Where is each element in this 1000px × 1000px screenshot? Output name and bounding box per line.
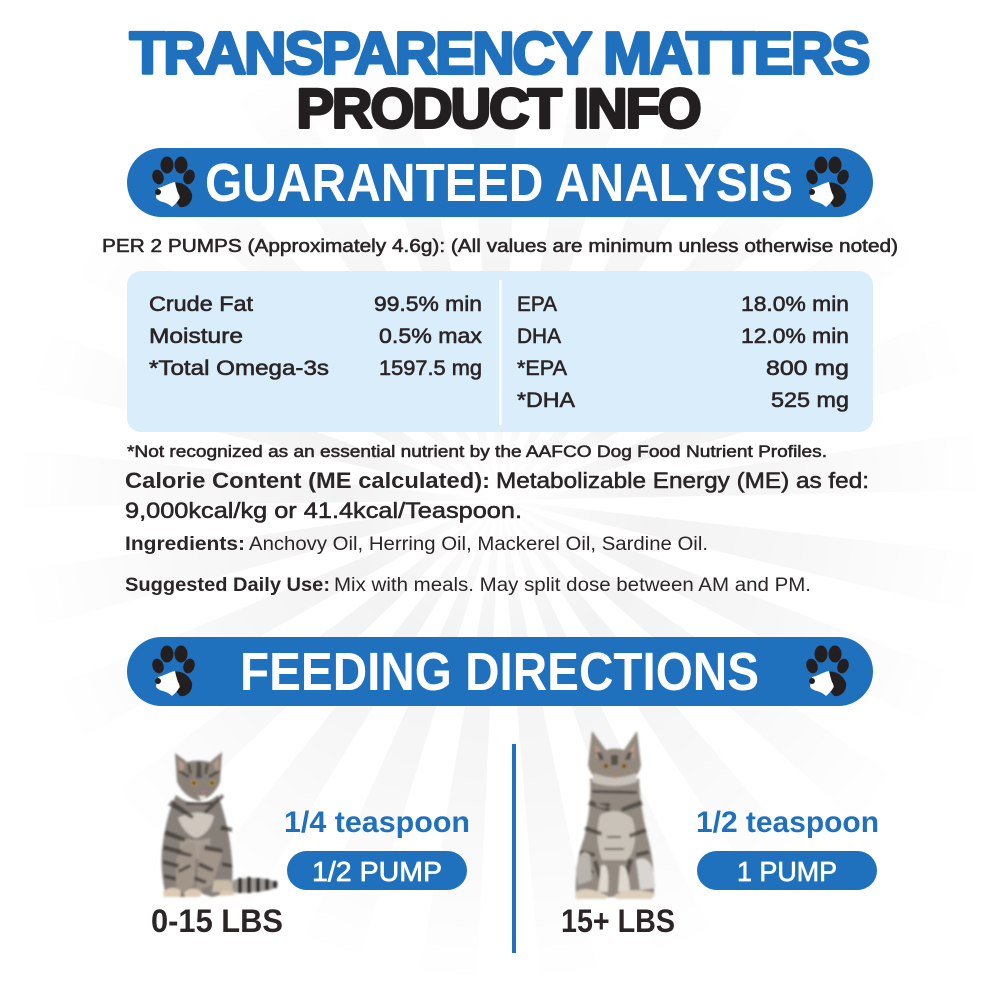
pill: 1/2 pump xyxy=(287,851,467,890)
left column: 1597.5 mg xyxy=(379,356,482,380)
left column: Crude Fat xyxy=(149,292,253,316)
right column: 12.0% min xyxy=(741,324,849,348)
label: 0-15 lbs: 0-15 LBS xyxy=(151,903,283,939)
title line: product info: PRODUCT INFO xyxy=(296,76,702,140)
icon: tabby cat small xyxy=(162,752,278,897)
icon: maine coon cat xyxy=(575,731,655,899)
right column: *DHA xyxy=(517,388,576,412)
right column: 525 mg xyxy=(771,388,849,412)
dose: 1/4 teaspoon: 1/4 teaspoon xyxy=(284,806,470,839)
icon: paw left xyxy=(150,156,197,207)
banner: feeding directions xyxy=(127,637,873,706)
ingredients: Ingredients: xyxy=(125,534,245,555)
suggested daily use: Suggested Daily Use: xyxy=(125,575,330,596)
right column xyxy=(517,292,849,412)
left column: Moisture xyxy=(149,324,243,348)
calorie content: Calorie Content (ME calculated): xyxy=(125,468,490,493)
subheading: per 2 pumps: PER 2 PUMPS (Approximately 4.6g): (All values are minimum unless otherwise noted) xyxy=(102,236,898,256)
pill: 1/2 pump: 1/2 PUMP xyxy=(312,856,442,887)
icon: paw right xyxy=(804,646,851,696)
right column: 18.0% min xyxy=(741,292,849,316)
label: 15+ lbs: 15+ LBS xyxy=(561,903,675,939)
pill: 1 pump: 1 PUMP xyxy=(737,856,837,887)
left column: *Total Omega-3s xyxy=(149,356,329,380)
calorie content xyxy=(125,468,869,523)
dose: 1/2 teaspoon: 1/2 teaspoon xyxy=(696,806,879,839)
pill: 1 pump xyxy=(697,851,877,890)
right column: 800 mg xyxy=(766,356,849,380)
right column: EPA xyxy=(517,292,558,316)
suggested daily use: Mix with meals. May split dose between AM and PM. xyxy=(334,575,811,596)
banner text: FEEDING DIRECTIONS xyxy=(240,642,759,702)
suggested daily use xyxy=(125,575,811,596)
divider xyxy=(512,744,516,953)
left column xyxy=(149,292,482,380)
banner text: GUARANTEED ANALYSIS xyxy=(205,153,793,213)
right column: DHA xyxy=(517,324,562,348)
calorie content: 9,000kcal/kg or 41.4kcal/Teaspoon. xyxy=(125,498,522,523)
right column: *EPA xyxy=(517,356,568,380)
title xyxy=(130,20,870,140)
banner: guaranteed analysis xyxy=(127,148,873,217)
calorie content: Metabolizable Energy (ME) as fed: xyxy=(496,468,869,493)
title line: transparency matters: TRANSPARENCY MATTERS xyxy=(130,20,870,86)
icon: paw left xyxy=(150,646,197,696)
icon: paw right xyxy=(804,156,851,207)
ingredients: Anchovy Oil, Herring Oil, Mackerel Oil, Sardine Oil. xyxy=(249,534,708,555)
panel: nutrient table xyxy=(127,271,873,432)
left column: 0.5% max xyxy=(379,324,482,348)
footnote: *Not recognized as an essential nutrient by the AAFCO Dog Food Nutrient Profiles. xyxy=(127,442,827,461)
left column: 99.5% min xyxy=(374,292,482,316)
